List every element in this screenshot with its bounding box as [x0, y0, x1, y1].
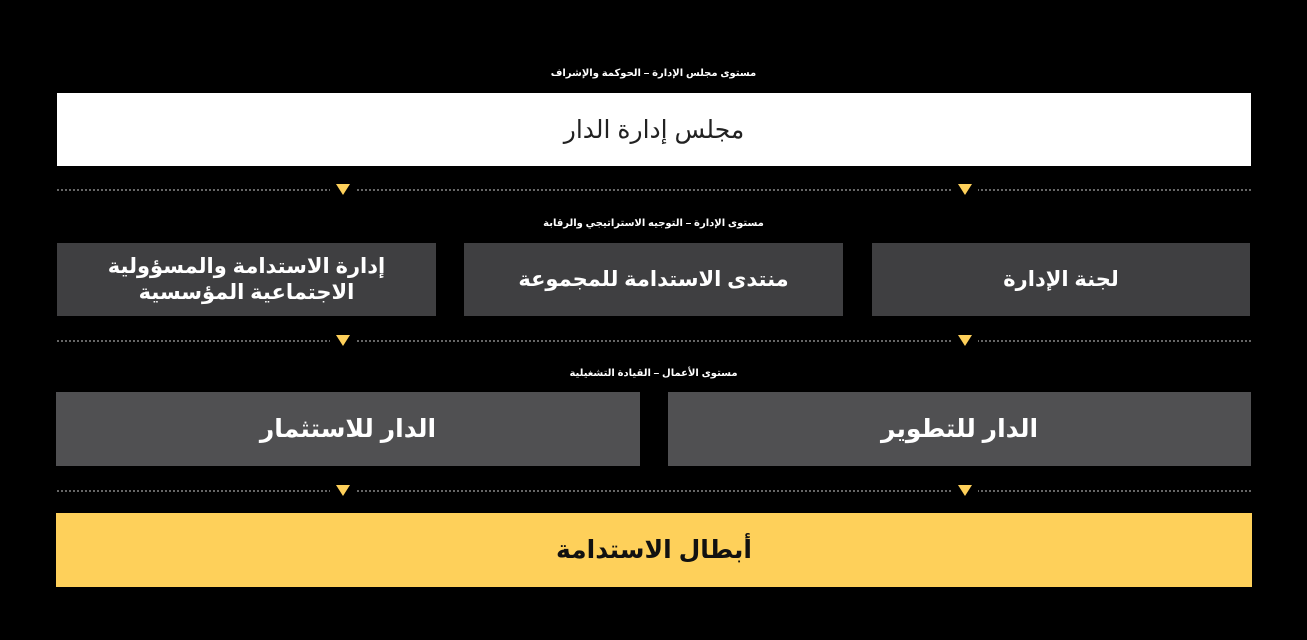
box: sustainability champions: أبطال الاستدامة	[556, 536, 752, 564]
box: group sustainability forum: منتدى الاستدامة للمجموعة	[518, 268, 789, 291]
box: board of directors	[57, 93, 1251, 166]
box: group sustainability forum	[464, 243, 843, 316]
box: management committee: لجنة الإدارة	[1003, 268, 1119, 291]
arrow: left	[330, 484, 356, 498]
arrow: right	[952, 484, 978, 498]
level label: business: مستوى الأعمال – القيادة التشغيلية	[569, 368, 738, 379]
level label: board: مستوى مجلس الإدارة – الحوكمة والإشراف	[551, 68, 756, 79]
box: sustainability champions	[56, 513, 1252, 587]
level label: management: مستوى الإدارة – التوجيه الاستراتيجي والرقابة	[543, 218, 764, 229]
box: management committee	[872, 243, 1250, 316]
arrow: left	[330, 334, 356, 348]
arrow: right	[952, 334, 978, 348]
connector row 1	[57, 184, 1251, 195]
box: Aldar Investment: الدار للاستثمار	[260, 415, 436, 443]
arrow: right	[952, 183, 978, 197]
box: CSR management	[57, 243, 436, 316]
connector row 2	[57, 335, 1251, 346]
box: Aldar Development	[668, 392, 1251, 466]
box: Aldar Development: الدار للتطوير	[881, 415, 1038, 443]
box: CSR management: الاجتماعية المؤسسية	[139, 280, 354, 304]
box: CSR management: إدارة الاستدامة والمسؤولية	[108, 254, 385, 278]
arrow: left	[330, 183, 356, 197]
box: board of directors: مجلس إدارة الدار	[564, 116, 744, 144]
connector row 3	[57, 485, 1251, 496]
box: Aldar Investment	[56, 392, 640, 466]
